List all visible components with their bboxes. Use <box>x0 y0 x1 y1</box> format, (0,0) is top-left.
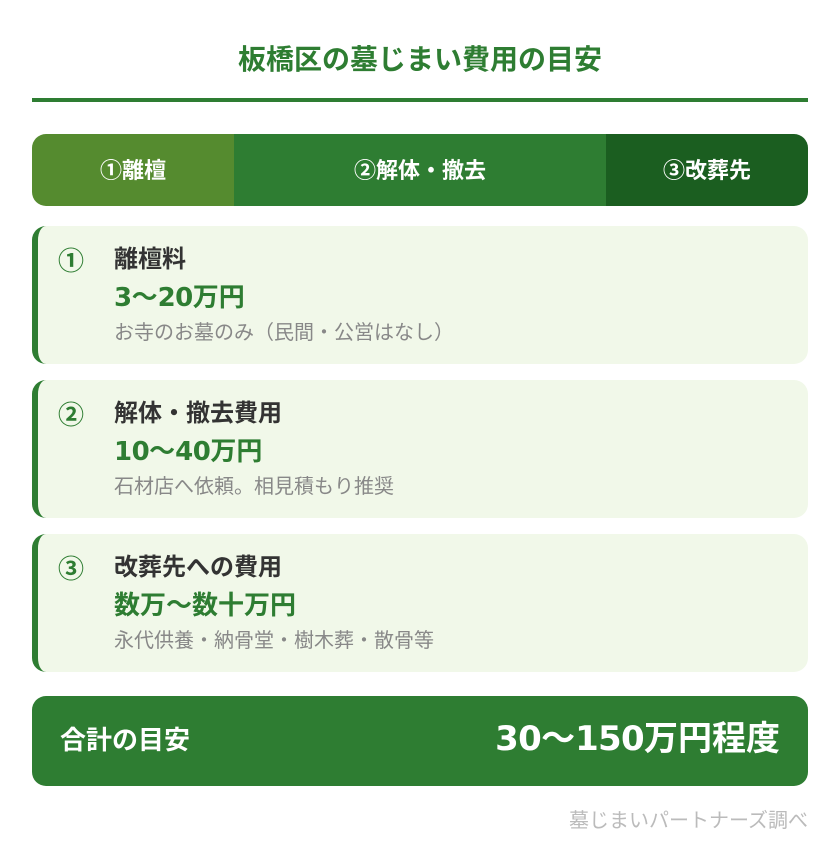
title: 板橋区の墓じまい費用の目安 <box>238 43 602 76</box>
card 1 heading: 離檀料 <box>114 245 186 273</box>
step 2 <box>234 134 606 206</box>
total label: 合計の目安 <box>60 726 190 756</box>
card 2 note: 石材店へ依頼。相見積もり推奨 <box>114 474 394 498</box>
panel: total <box>32 696 808 786</box>
panel: card 1 <box>32 226 808 364</box>
card 1 amount: 3〜20万円 <box>114 283 245 313</box>
card 3 amount: 数万〜数十万円 <box>114 591 296 621</box>
step 3 <box>606 134 808 206</box>
card 1 note: お寺のお墓のみ（民間・公営はなし） <box>114 320 454 344</box>
source note: 墓じまいパートナーズ調べ <box>569 808 808 832</box>
step 3: ③改葬先 <box>663 153 751 185</box>
card 2 amount: 10〜40万円 <box>114 437 262 467</box>
step 2: ②解体・撤去 <box>354 153 486 185</box>
number 2: ② <box>58 395 84 432</box>
step bar <box>32 134 808 206</box>
card 2 heading: 解体・撤去費用 <box>114 399 282 427</box>
total value: 30〜150万円程度 <box>495 719 780 759</box>
card 3 note: 永代供養・納骨堂・樹木葬・散骨等 <box>114 628 434 652</box>
number 3: ③ <box>58 549 84 586</box>
card 3 heading: 改葬先への費用 <box>114 553 282 581</box>
step 1 <box>32 134 234 206</box>
number 1: ① <box>58 241 84 278</box>
panel: card 2 <box>32 380 808 518</box>
step 1: ①離檀 <box>100 153 166 185</box>
panel: card 3 <box>32 534 808 672</box>
